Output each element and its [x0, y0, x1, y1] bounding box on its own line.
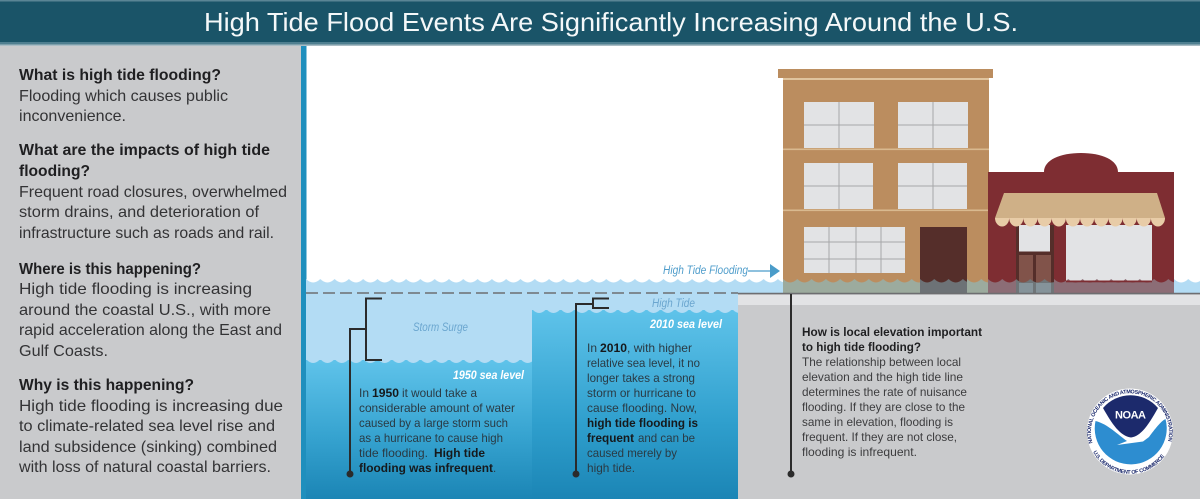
door — [920, 227, 967, 294]
text block: 2010 explanation: storm or hurricane to — [587, 387, 696, 400]
text block: 2010 explanation: cause flooding. Now, — [587, 402, 697, 415]
bracket: storm surge — [348, 298, 382, 476]
text block: why is this happening — [18, 377, 283, 476]
header banner — [0, 0, 1200, 46]
title: High Tide Flood Events Are Significantly Increasing Around the U.S. — [204, 7, 1018, 37]
bracket: high tide — [574, 298, 609, 476]
text block: where is this happening: Where is this happening? — [19, 261, 201, 278]
text block: 1950 explanation: it would take a — [402, 387, 478, 400]
flood water band across the street — [306, 279, 1200, 294]
text block: local elevation: determines the rate of nuisance — [802, 386, 967, 399]
text block: 2010 explanation: In — [587, 342, 597, 355]
text block: where is this happening: around the coastal U.S., with more — [19, 302, 271, 319]
text block: 2010 explanation: , with higher — [627, 342, 692, 355]
text block: local elevation — [802, 326, 982, 459]
text block: local elevation: flooding. If they are close to the — [802, 401, 965, 414]
dashed high tide line — [306, 292, 1200, 294]
text block: impacts of high tide flooding — [19, 142, 287, 242]
text block: impacts of high tide flooding: Frequent road closures, overwhelmed — [19, 184, 287, 201]
panel: left questions and answers — [0, 46, 306, 499]
text block: why is this happening: to climate-related sea level rise and — [19, 418, 275, 435]
label: 2010 sea level: 2010 sea level — [649, 317, 723, 331]
text block: 2010 explanation: high tide flooding is — [587, 417, 698, 430]
text block: 1950 explanation — [359, 387, 515, 475]
text block: 2010 explanation: and can be — [638, 432, 695, 445]
label: high tide: High Tide — [652, 298, 695, 310]
text block: impacts of high tide flooding: storm drains, and deterioration of — [19, 204, 260, 221]
text block: 2010 explanation: 2010 — [600, 342, 627, 355]
icon: NOAA logo — [1087, 388, 1173, 474]
text block: 1950 explanation: . — [493, 462, 496, 475]
water column: 2010 sea level — [532, 294, 738, 499]
text block: local elevation: frequent. If they are not close, — [802, 431, 957, 444]
icon: NOAA logo: NATIONAL OCEANIC AND ATMOSPHERIC ADMINISTRATION — [1087, 390, 1173, 444]
label: storm surge: Storm Surge — [413, 322, 468, 334]
ground with sidewalk — [738, 294, 1200, 499]
text block: where is this happening: Gulf Coasts. — [19, 343, 108, 360]
windows: upper floors — [804, 102, 968, 273]
text block: what is high tide flooding — [19, 67, 228, 125]
leader line: local elevation — [788, 294, 794, 476]
text block: 1950 explanation: caused by a large storm such — [359, 417, 508, 430]
text block: 1950 explanation: as a hurricane to cause high — [359, 432, 503, 445]
text block: where is this happening: rapid acceleration along the East and — [19, 322, 282, 339]
text block: what is high tide flooding: inconvenience. — [19, 108, 126, 125]
text block: local elevation: same in elevation, flooding is — [802, 416, 953, 429]
building: red storefront — [988, 153, 1174, 294]
text block: 1950 explanation: In — [359, 387, 369, 400]
text block: what is high tide flooding: Flooding which causes public — [19, 88, 228, 105]
text block: local elevation: elevation and the high tide line — [802, 371, 963, 384]
text block: 1950 explanation: considerable amount of water — [359, 402, 515, 415]
text block: 1950 explanation: 1950 — [372, 387, 399, 400]
text block: 1950 explanation: High tide — [434, 447, 486, 460]
text block: why is this happening: Why is this happening? — [19, 377, 194, 394]
text block: 2010 explanation — [587, 342, 700, 475]
text block: impacts of high tide flooding: flooding? — [19, 163, 90, 180]
text block: where is this happening: High tide flooding is increasing — [19, 281, 252, 298]
text block: local elevation: to high tide flooding? — [802, 341, 921, 354]
shop window — [1066, 225, 1152, 280]
icon: NOAA logo: U.S. DEPARTMENT OF COMMERCE — [1094, 450, 1164, 474]
text block: 1950 explanation: flooding was infrequent — [359, 462, 493, 475]
text block: impacts of high tide flooding: infrastructure such as roads and rail. — [19, 225, 274, 242]
text block: 2010 explanation: frequent — [587, 432, 634, 445]
text block: 2010 explanation: high tide. — [587, 462, 635, 475]
text block: impacts of high tide flooding: What are the impacts of high tide — [19, 142, 270, 159]
text block: local elevation: How is local elevation important — [802, 326, 982, 339]
text block: local elevation: The relationship between local — [802, 356, 961, 369]
label: high tide flooding with arrow: High Tide Flooding — [663, 265, 749, 277]
text block: 2010 explanation: caused merely by — [587, 447, 677, 460]
text block: 1950 explanation: tide flooding. — [359, 447, 428, 460]
text block: local elevation: flooding is infrequent. — [802, 446, 917, 459]
water column: 1950 sea level — [306, 294, 532, 499]
text block: why is this happening: High tide flooding is increasing due — [19, 398, 283, 415]
text block: why is this happening: with loss of natural coastal barriers. — [18, 459, 271, 476]
building: brick apartment — [778, 69, 993, 294]
awning — [995, 193, 1165, 227]
text block: 2010 explanation: longer takes a strong — [587, 372, 695, 385]
window mullions — [804, 102, 968, 273]
text block: where is this happening — [19, 261, 282, 360]
text block: why is this happening: land subsidence (sinking) combined — [19, 439, 277, 456]
label: 1950 sea level: 1950 sea level — [453, 368, 525, 382]
text block: 2010 explanation: relative sea level, it no — [587, 357, 700, 370]
shop door — [1016, 225, 1054, 294]
icon: NOAA logo: NOAA — [1115, 410, 1146, 422]
text block: what is high tide flooding: What is high tide flooding? — [19, 67, 221, 84]
